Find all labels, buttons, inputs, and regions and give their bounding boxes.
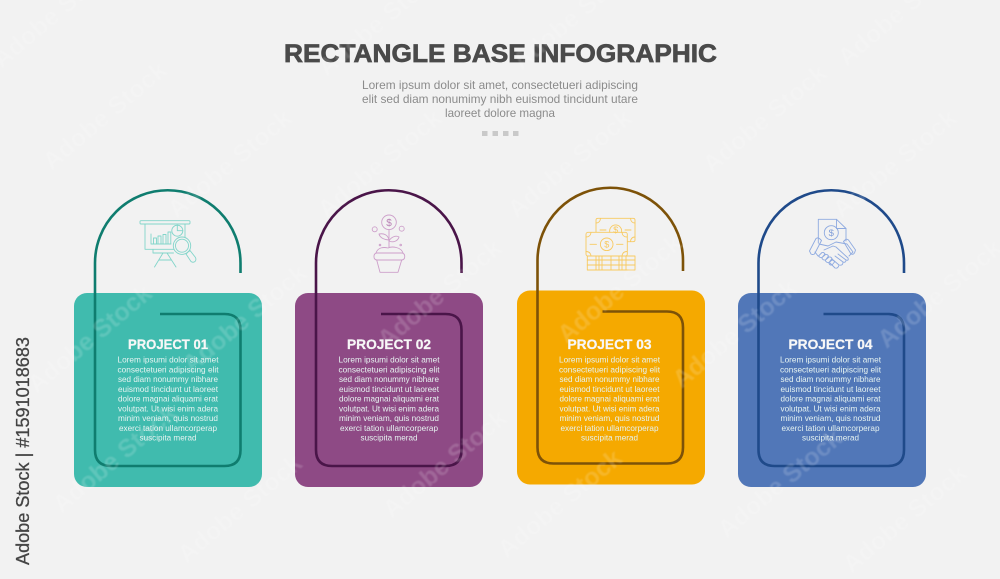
- body text: project 04: euismod tincidunt ut laoreet: [780, 384, 881, 394]
- icon: money plant in pot: [372, 215, 405, 272]
- arch outline: project 04: [758, 190, 904, 466]
- body text: project 02: exerci tation ullamcorperap: [340, 423, 438, 433]
- stock watermark pattern: Adobe Stock: [492, 444, 627, 564]
- body text: project 04: suscipita merad: [802, 433, 859, 443]
- stock watermark pattern: Adobe Stock: [697, 59, 832, 179]
- stock watermark pattern: Adobe Stock: [162, 104, 297, 224]
- card: project 04: [738, 293, 926, 487]
- body text: project 01: exerci tation ullamcorperap: [119, 423, 217, 433]
- body text: project 04: [780, 355, 882, 443]
- stock watermark pattern: Adobe Stock: [377, 404, 512, 524]
- panel: project 03: [517, 188, 705, 484]
- card: project 02: [295, 293, 483, 487]
- icon: money plant in pot: $: [386, 218, 392, 229]
- stock watermark pattern: Adobe Stock: [177, 259, 312, 379]
- stock watermark pattern: Adobe Stock: [827, 104, 962, 224]
- stock watermark pattern: Adobe Stock: [47, 399, 182, 519]
- icon: banknotes and stack: $: [613, 225, 618, 235]
- heading: project 04: PROJECT 04: [788, 336, 873, 352]
- body text: project 02: suscipita merad: [360, 433, 418, 443]
- body text: project 03: suscipita merad: [581, 433, 638, 443]
- stock watermark pattern: Adobe Stock: [552, 229, 687, 349]
- body text: project 03: volutpat. Ut wisi enim adera: [560, 404, 660, 414]
- subtitle text block: laoreet dolore magna: [445, 106, 555, 120]
- card: project 01: [74, 293, 262, 487]
- body text: project 02: minim veniam, quis nostrud: [339, 413, 439, 423]
- body text: project 03: [559, 355, 661, 443]
- stock watermark pattern: Adobe Stock: [37, 56, 172, 176]
- body text: project 04: exerci tation ullamcorperap: [782, 423, 880, 433]
- body text: project 04: dolore magnai aliquami erat: [780, 394, 881, 404]
- body text: project 04: sed diam nonummy nibhare: [780, 374, 881, 384]
- title: RECTANGLE BASE INFOGRAPHIC: [284, 40, 717, 68]
- body text: project 02: sed diam nonummy nibhare: [339, 374, 439, 384]
- body text: project 02: dolore magnai aliquami erat: [339, 394, 440, 404]
- stock watermark pattern: Adobe Stock: [312, 104, 447, 224]
- body text: project 03: exerci tation ullamcorperap: [560, 423, 659, 433]
- card: project 03: [517, 290, 705, 484]
- body text: project 01: sed diam nonummy nibhare: [118, 374, 218, 384]
- body text: project 01: Lorem ipsumi dolor sit amet: [118, 355, 219, 365]
- stock watermark pattern: Adobe Stock: [712, 424, 847, 544]
- subtitle text block: elit sed diam nonumimy nibh euismod tincidunt utare: [362, 92, 638, 106]
- panel: project 02: [295, 190, 483, 487]
- side credit text: Adobe Stock | #1591018683: [13, 337, 33, 565]
- body text: project 03: euismod tincidunt ut laoreet: [560, 384, 660, 394]
- heading: project 02: PROJECT 02: [347, 336, 431, 352]
- panel: project 01: [74, 190, 262, 487]
- stock watermark pattern: Adobe Stock: [172, 449, 307, 569]
- body text: project 01: minim veniam, quis nostrud: [118, 413, 218, 423]
- body text: project 03: minim veniam, quis nostrud: [560, 413, 660, 423]
- icon: contract and handshake: $: [829, 228, 835, 239]
- stock watermark pattern: Adobe Stock: [502, 104, 637, 224]
- icon: banknotes and stack: [586, 218, 635, 270]
- heading: project 03: PROJECT 03: [568, 336, 652, 352]
- stock watermark pattern: Adobe Stock: [22, 279, 157, 399]
- body text: project 03: Lorem ipsumi dolor sit amet: [559, 355, 661, 365]
- body text: project 04: volutpat. Ut wisi enim adera: [780, 404, 881, 414]
- pagination dots: [482, 131, 518, 136]
- arch outline: project 03: [538, 188, 683, 464]
- body text: project 03: dolore magnai aliquami erat: [560, 394, 660, 404]
- body text: project 01: volutpat. Ut wisi enim adera: [118, 404, 218, 414]
- body text: project 01: consectetueri adipiscing elit: [118, 364, 219, 374]
- body text: project 04: Lorem ipsumi dolor sit amet: [780, 355, 882, 365]
- body text: project 01: suscipita merad: [140, 433, 197, 443]
- icon: banknotes and stack: $: [604, 240, 609, 250]
- subtitle text block: [362, 78, 638, 120]
- body text: project 01: euismod tincidunt ut laoreet: [118, 384, 219, 394]
- subtitle text block: Lorem ipsum dolor sit amet, consectetueri adipiscing: [362, 78, 638, 92]
- arch outline: project 01: [95, 190, 240, 466]
- body text: project 02: Lorem ipsumi dolor sit amet: [338, 355, 440, 365]
- body text: project 01: dolore magnai aliquami erat: [118, 394, 219, 404]
- heading: project 01: PROJECT 01: [128, 336, 208, 352]
- body text: project 04: minim veniam, quis nostrud: [780, 413, 881, 423]
- body text: project 04: consectetueri adipiscing elit: [780, 364, 882, 374]
- stock watermark pattern: Adobe Stock: [837, 459, 972, 579]
- panel: project 04: [738, 190, 926, 487]
- stock watermark pattern: Adobe Stock: [667, 274, 802, 394]
- stock watermark pattern: Adobe Stock: [372, 234, 507, 354]
- body text: project 03: sed diam nonummy nibhare: [560, 374, 660, 384]
- arch outline: project 02: [316, 190, 462, 466]
- body text: project 01: [118, 355, 219, 443]
- body text: project 02: euismod tincidunt ut laoreet: [339, 384, 440, 394]
- body text: project 02: [338, 355, 440, 443]
- body text: project 02: volutpat. Ut wisi enim adera: [339, 404, 439, 414]
- body text: project 03: consectetueri adipiscing elit: [559, 364, 661, 374]
- icon: presentation board with magnifier: [140, 221, 196, 267]
- icon: contract and handshake: [810, 219, 856, 268]
- body text: project 02: consectetueri adipiscing elit: [338, 364, 440, 374]
